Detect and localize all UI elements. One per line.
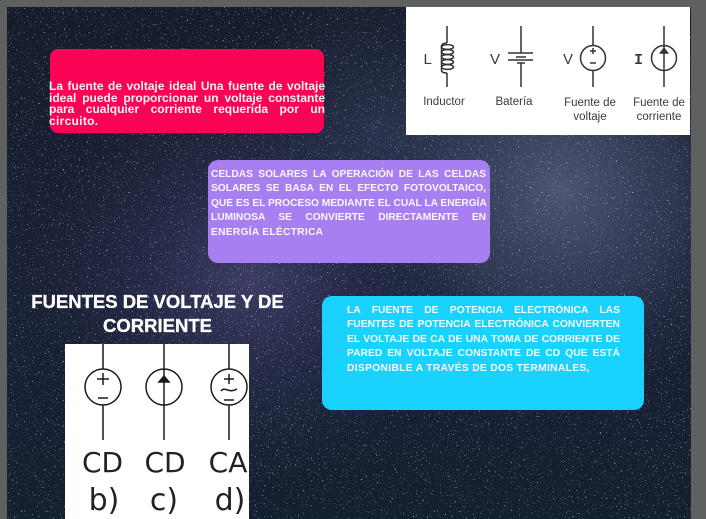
panel: source types diagram <box>65 344 249 519</box>
option labels <box>89 483 245 518</box>
symbol letters: L <box>424 51 432 68</box>
text: solar cells: QUE ES EL PROCESO MEDIANTE EL CUAL LA ENERGÍA <box>211 198 487 208</box>
text: electronic power source <box>347 304 620 374</box>
option labels: c) <box>150 483 178 518</box>
icon: AC voltage source <box>211 344 247 440</box>
panel: circuit symbols <box>406 7 690 135</box>
icon: voltage source <box>580 26 606 87</box>
type labels: CD <box>144 446 186 479</box>
icon: DC current source <box>146 344 182 440</box>
text: electronic power source: FUENTES DE POTENCIA ELECTRÓNICA CONVIERTEN <box>347 319 620 330</box>
symbol letters: V <box>563 51 573 68</box>
text: electronic power source: PARED EN VOLTAJE CONSTANTE DE CD QUE ESTÁ <box>347 348 620 359</box>
symbol letters: I <box>634 52 643 69</box>
icon: battery <box>508 26 533 87</box>
heading <box>31 291 284 336</box>
symbol captions: corriente <box>637 111 681 123</box>
icon: inductor <box>441 26 454 87</box>
text: electronic power source: DISPONIBLE A TRAVÉS DE DOS TERMINALES, <box>347 362 590 374</box>
symbol letters <box>424 51 643 69</box>
symbol captions: Inductor <box>423 96 465 108</box>
icon: DC voltage source <box>85 344 121 440</box>
text: electronic power source: EL VOLTAJE DE CA DE UNA TOMA DE CORRIENTE DE <box>347 334 620 344</box>
text: solar cells <box>211 168 487 238</box>
symbol letters: V <box>490 51 500 68</box>
panel: ideal voltage source <box>50 49 324 133</box>
type labels <box>82 446 247 479</box>
symbol captions <box>423 96 685 123</box>
heading: FUENTES DE VOLTAJE Y DE <box>31 291 284 312</box>
option labels: b) <box>89 483 119 518</box>
symbol captions: Fuente de <box>633 97 685 109</box>
panel: solar cells <box>208 160 490 263</box>
icon: current source <box>652 26 676 87</box>
panel: electronic power source <box>322 296 644 410</box>
text: electronic power source: LA FUENTE DE POTENCIA ELECTRÓNICA LAS <box>347 304 620 316</box>
symbol captions: Fuente de <box>564 97 616 109</box>
text: ideal voltage source: para cualquier corriente requerida por un <box>49 102 325 116</box>
text: ideal voltage source: ideal puede proporcionar un voltaje constante <box>49 91 325 105</box>
symbol captions: voltaje <box>573 111 607 123</box>
text: ideal voltage source <box>49 79 325 128</box>
text: solar cells: ENERGÍA ELÉCTRICA <box>211 226 323 238</box>
option labels: d) <box>215 483 245 518</box>
text: solar cells: CELDAS SOLARES LA OPERACIÓN DE LAS CELDAS <box>211 168 486 180</box>
type labels: CD <box>82 446 123 479</box>
heading: CORRIENTE <box>103 315 212 336</box>
symbol captions: Batería <box>495 96 533 108</box>
text: solar cells: SOLARES SE BASA EN EL EFECTO FOTOVOLTAICO, <box>211 183 486 194</box>
text: ideal voltage source: circuito. <box>49 114 98 128</box>
text: solar cells: LUMINOSA SE CONVIERTE DIRECTAMENTE EN <box>211 212 486 223</box>
text: ideal voltage source: La fuente de voltaje ideal Una fuente de voltaje <box>49 79 325 93</box>
type labels: CA <box>209 446 247 479</box>
